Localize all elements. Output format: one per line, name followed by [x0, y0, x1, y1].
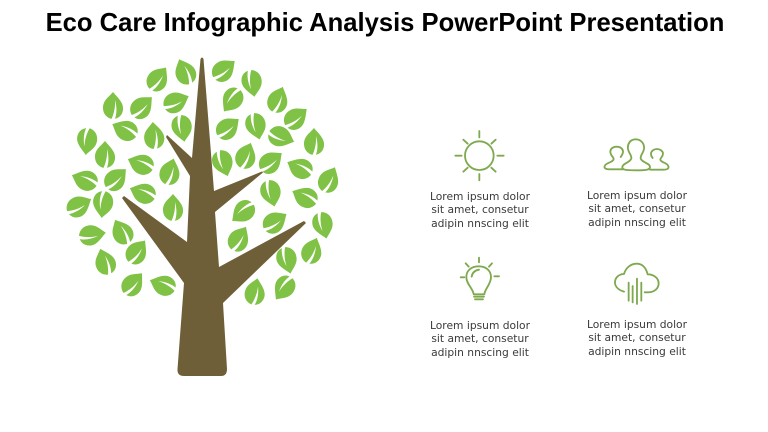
tree leaves	[62, 53, 344, 308]
icon: light bulb	[461, 258, 499, 299]
text: people caption: sit amet, consetur	[588, 202, 686, 215]
icon: rain cloud	[615, 264, 659, 304]
text: cloud caption	[587, 318, 688, 358]
text: cloud caption: Lorem ipsum dolor	[587, 318, 688, 331]
text: bulb caption: adipin nnscing elit	[431, 346, 529, 359]
text: bulb caption: sit amet, consetur	[431, 332, 529, 345]
text: sun caption: adipin nnscing elit	[431, 217, 529, 230]
title: Eco Care Infographic Analysis PowerPoint Presentation	[46, 9, 724, 37]
text: cloud caption: adipin nnscing elit	[588, 345, 686, 358]
feature: light bulb	[430, 258, 531, 359]
text: cloud caption: sit amet, consetur	[588, 331, 686, 344]
feature: people	[587, 139, 688, 229]
text: sun caption: Lorem ipsum dolor	[430, 190, 531, 203]
text: sun caption: sit amet, consetur	[431, 203, 529, 216]
text: people caption	[587, 189, 688, 229]
text: sun caption	[430, 190, 531, 230]
tree illustration	[62, 53, 344, 376]
text: people caption: adipin nnscing elit	[588, 216, 686, 229]
tree trunk and branches	[122, 58, 306, 376]
text: bulb caption: Lorem ipsum dolor	[430, 319, 531, 332]
feature: sun	[430, 131, 531, 230]
icon: sun	[455, 131, 504, 180]
feature: rain cloud	[587, 264, 688, 358]
text: bulb caption	[430, 319, 531, 359]
icon: people	[604, 139, 669, 170]
text: people caption: Lorem ipsum dolor	[587, 189, 688, 202]
